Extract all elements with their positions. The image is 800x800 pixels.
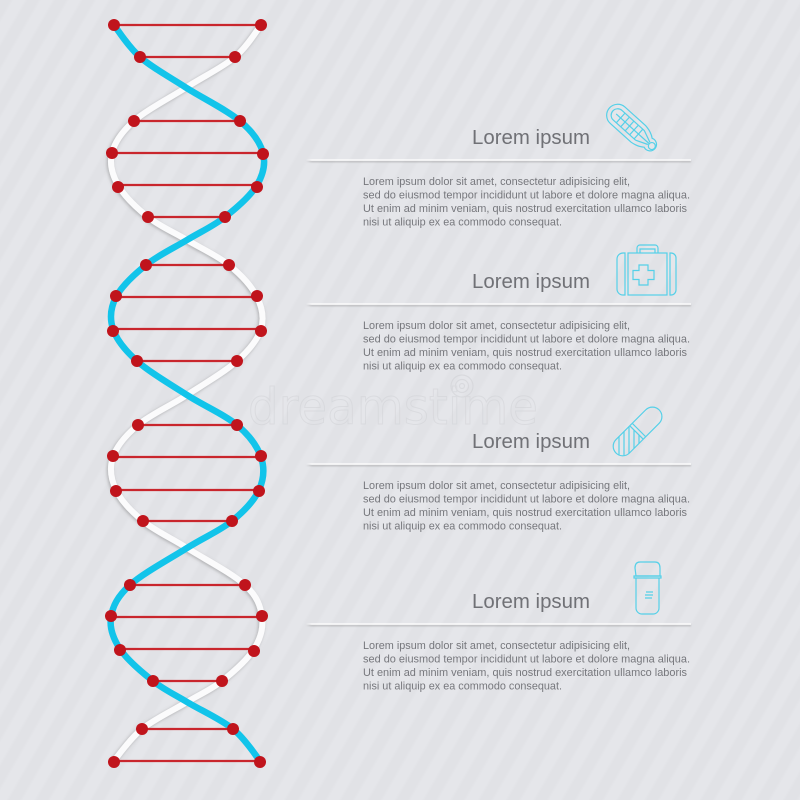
DNA double helix — [105, 19, 269, 768]
body text: sed do eiusmod tempor incididunt ut labore et dolore magna aliqua. — [363, 654, 690, 666]
body text — [363, 640, 690, 692]
icon: pill capsule — [612, 406, 662, 456]
body text: Lorem ipsum dolor sit amet, consectetur adipisicing elit, — [363, 176, 630, 188]
divider line — [306, 303, 691, 305]
icon: first aid kit — [617, 245, 676, 295]
infographic canvas — [105, 19, 692, 768]
heading: Lorem ipsum — [472, 127, 590, 149]
body text: nisi ut aliquip ex ea commodo consequat. — [363, 216, 562, 228]
panel: section 3 — [306, 403, 691, 532]
body text — [363, 320, 690, 372]
divider line — [306, 159, 691, 161]
divider line — [306, 463, 691, 465]
icon: thermometer — [602, 100, 662, 157]
icon: medicine bottle — [634, 562, 661, 614]
body text: Lorem ipsum dolor sit amet, consectetur adipisicing elit, — [363, 320, 630, 332]
heading: Lorem ipsum — [472, 591, 590, 613]
body text: Ut enim ad minim veniam, quis nostrud exercitation ullamco laboris — [363, 203, 687, 215]
body text: sed do eiusmod tempor incididunt ut labore et dolore magna aliqua. — [363, 494, 690, 506]
red nodes — [105, 19, 269, 768]
body text — [363, 480, 690, 532]
body text: sed do eiusmod tempor incididunt ut labore et dolore magna aliqua. — [363, 190, 690, 202]
panel: section 4 — [306, 562, 691, 692]
panel: section 2 — [306, 245, 691, 372]
watermark: dreamstime — [248, 378, 538, 436]
body text: Ut enim ad minim veniam, quis nostrud exercitation ullamco laboris — [363, 667, 687, 679]
panel: section 1 — [306, 100, 691, 228]
body text: Lorem ipsum dolor sit amet, consectetur adipisicing elit, — [363, 640, 630, 652]
red base-pair rungs — [111, 25, 263, 761]
body text: Lorem ipsum dolor sit amet, consectetur adipisicing elit, — [363, 480, 630, 492]
body text: Ut enim ad minim veniam, quis nostrud exercitation ullamco laboris — [363, 347, 687, 359]
body text: Ut enim ad minim veniam, quis nostrud exercitation ullamco laboris — [363, 507, 687, 519]
heading: Lorem ipsum — [472, 271, 590, 293]
divider line — [306, 623, 691, 625]
body text — [363, 176, 690, 228]
body text: nisi ut aliquip ex ea commodo consequat. — [363, 680, 562, 692]
body text: nisi ut aliquip ex ea commodo consequat. — [363, 520, 562, 532]
body text: nisi ut aliquip ex ea commodo consequat. — [363, 360, 562, 372]
body text: sed do eiusmod tempor incididunt ut labore et dolore magna aliqua. — [363, 334, 690, 346]
white strand — [111, 25, 263, 761]
cyan strand — [111, 25, 264, 761]
heading: Lorem ipsum — [472, 431, 590, 453]
